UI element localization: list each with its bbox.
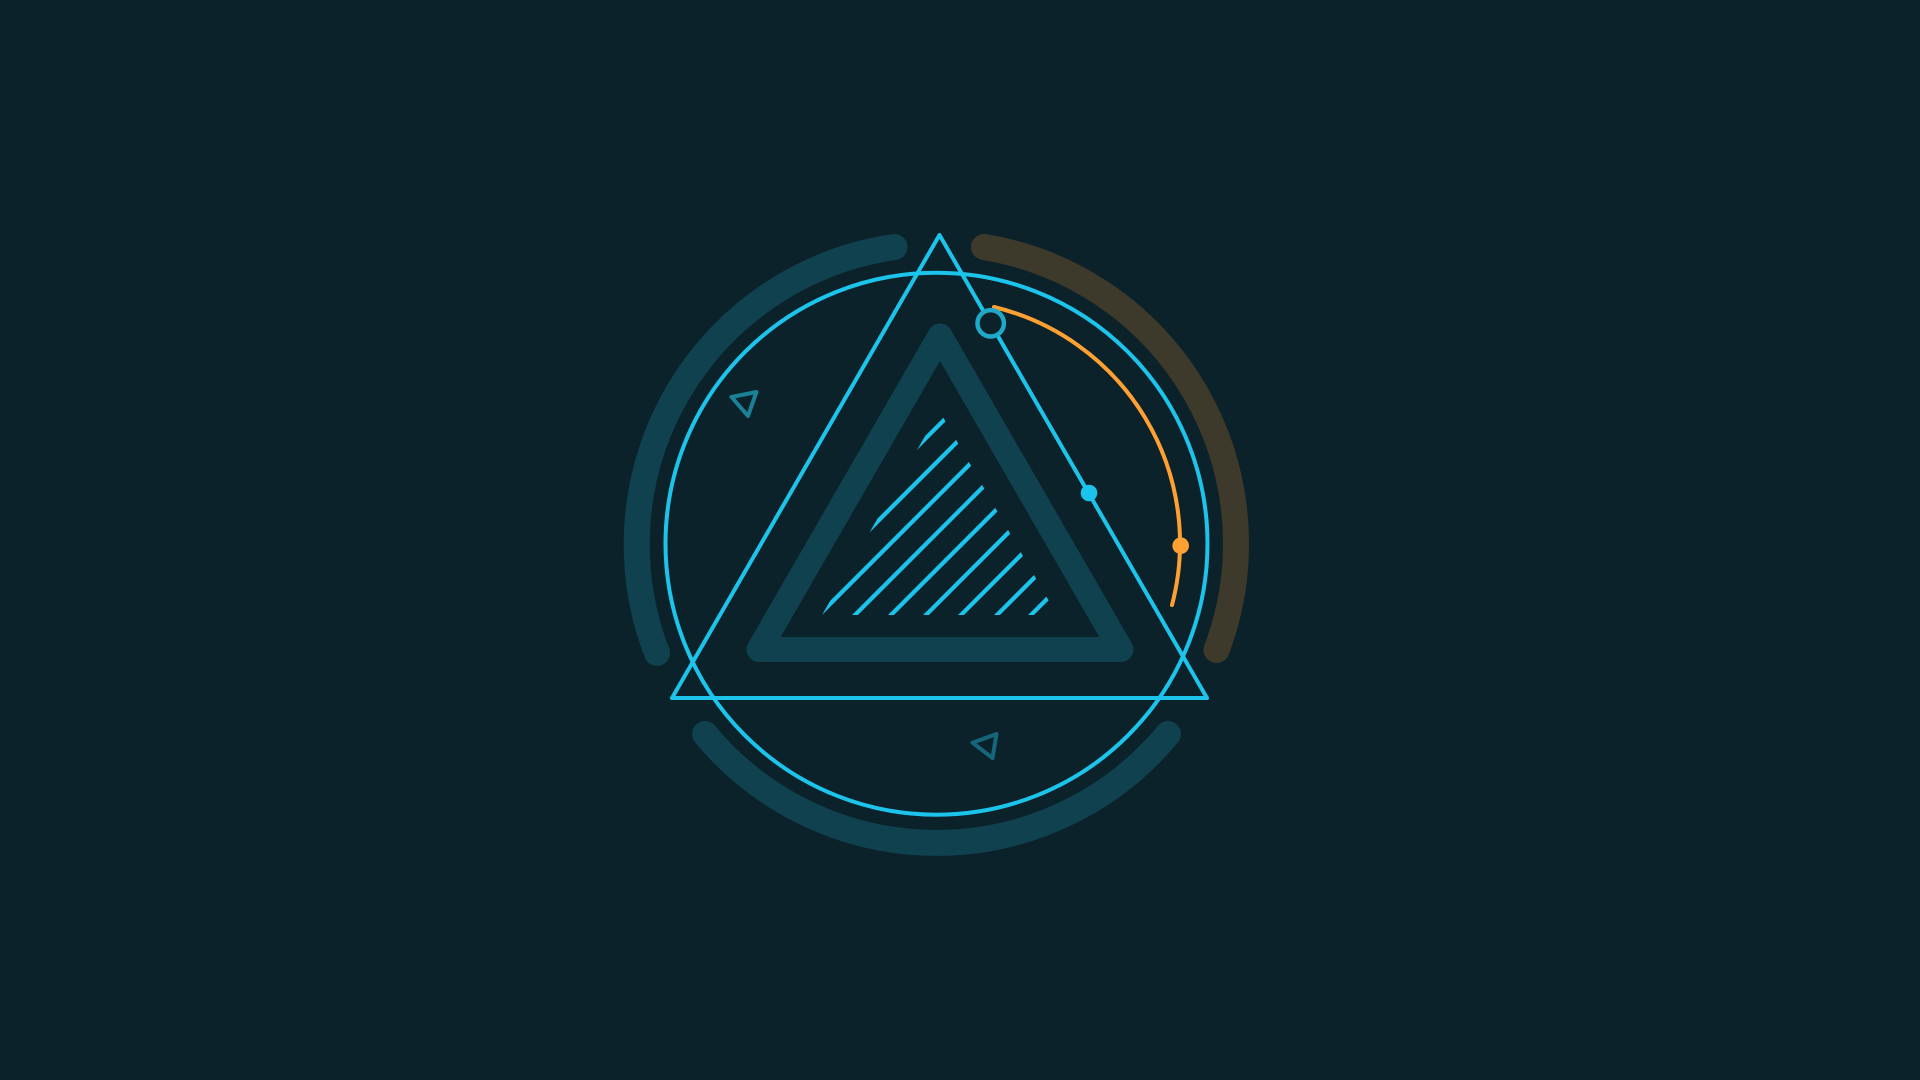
inner thick triangle: [759, 336, 1121, 650]
outer segmented ring: [637, 247, 1236, 843]
blue dot: [1081, 485, 1097, 501]
small triangle: bottom: [972, 734, 996, 758]
arc: right amber segment: [984, 247, 1236, 650]
ring marker: [978, 310, 1004, 336]
arc: left teal segment: [637, 247, 894, 653]
main circle: [666, 273, 1208, 815]
outer thin triangle: [672, 235, 1207, 698]
arc: bottom teal segment: [705, 734, 1168, 843]
orange dot: [1172, 537, 1189, 554]
emblem graphic: [624, 232, 1249, 856]
small triangle: upper left: [732, 392, 756, 416]
amber orbit arc: [994, 307, 1180, 605]
hatched triangle: [822, 418, 1049, 615]
